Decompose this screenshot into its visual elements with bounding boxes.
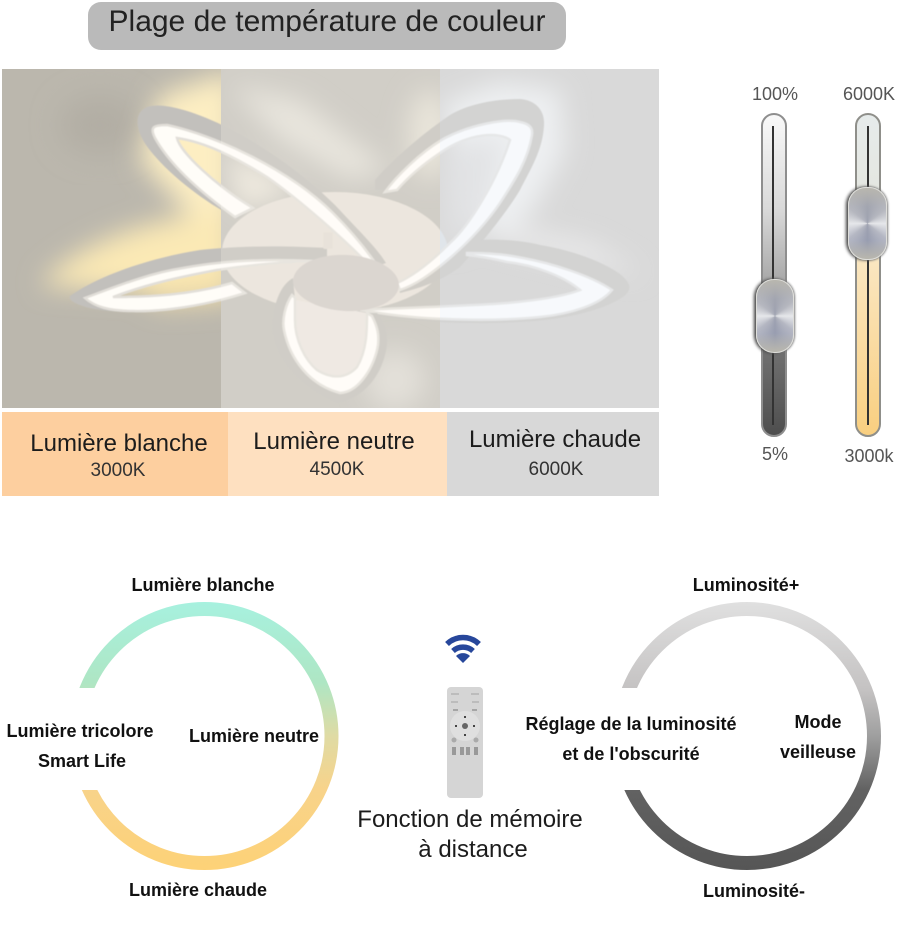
brightness line — [772, 126, 774, 425]
panel: white light label — [2, 412, 228, 496]
temperature track — [855, 113, 881, 437]
ring: brightness — [622, 602, 881, 870]
colour temperature slider — [844, 113, 890, 437]
ring label: brightness and dimming — [525, 714, 737, 764]
temperature knob — [848, 187, 887, 260]
title: Plage de température de couleur — [109, 5, 545, 38]
ring label: Luminosité+: Luminosité+ — [693, 575, 799, 595]
title — [88, 2, 566, 50]
slider labels: 3000k: 3000k — [844, 446, 894, 466]
ring label: night mode — [780, 712, 856, 762]
ring label: brightness and dimming: Réglage de la luminosité — [525, 714, 737, 734]
ring: colour temperature — [80, 602, 338, 870]
brightness knob — [756, 279, 794, 353]
label: Lumière chaude: Lumière chaude — [469, 426, 641, 453]
slider labels: 5%: 5% — [762, 444, 788, 464]
brightness slider — [752, 113, 796, 437]
panel: lamp photo with colour temperature zones — [2, 69, 659, 408]
ring label: Smart Life: Smart Life — [38, 751, 126, 771]
caption: remote memory function: à distance — [418, 836, 528, 863]
panel: neutral light label — [228, 412, 447, 496]
ring label: night mode: veilleuse — [780, 742, 856, 762]
value: 4500K: 4500K — [310, 459, 364, 480]
label: Lumière neutre: Lumière neutre — [253, 428, 415, 455]
caption: remote memory function — [357, 806, 583, 863]
ring label: Lumière neutre: Lumière neutre — [189, 726, 319, 746]
zone: neutral middle — [221, 69, 440, 408]
ring label: Lumière tricolore: Lumière tricolore — [6, 721, 154, 741]
slider labels: 6000K: 6000K — [843, 84, 895, 104]
slider labels: 100%: 100% — [752, 84, 798, 104]
temperature line — [867, 126, 869, 425]
icon: remote control — [447, 687, 483, 798]
ring label: night mode: Mode — [794, 712, 842, 732]
ring label: Lumière blanche: Lumière blanche — [131, 575, 275, 595]
ring label: brightness and dimming: et de l'obscurité — [562, 744, 700, 764]
caption: remote memory function: Fonction de mémoire — [357, 806, 583, 833]
ring label: Lumière chaude: Lumière chaude — [129, 880, 267, 900]
ring label: Luminosité-: Luminosité- — [703, 881, 805, 901]
icon: wifi — [445, 634, 481, 663]
value: 3000K: 3000K — [91, 460, 145, 481]
zone: cool right — [440, 69, 659, 408]
panel: warm light label — [447, 412, 659, 496]
label: Lumière blanche: Lumière blanche — [30, 430, 208, 457]
value: 6000K: 6000K — [529, 459, 583, 480]
brightness track — [761, 113, 787, 437]
zone: warm left — [2, 69, 221, 408]
